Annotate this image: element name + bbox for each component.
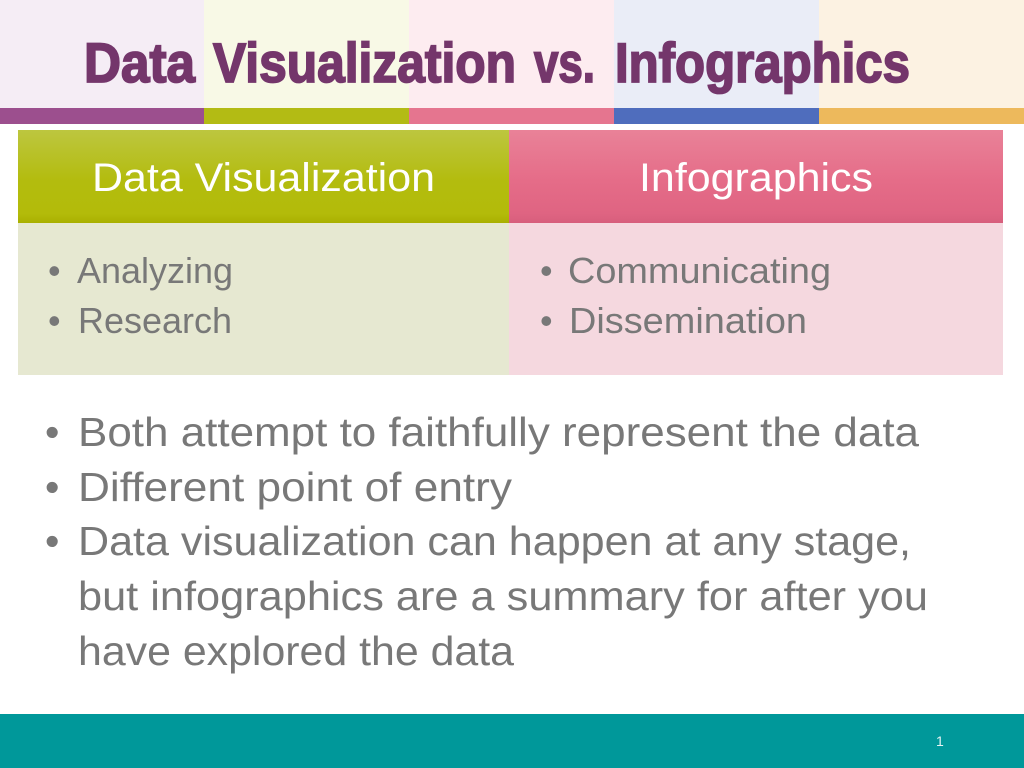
column header: data visualization (18, 130, 509, 223)
bullet list: Data visualization can happen at any stage, (78, 518, 911, 564)
panel: data visualization (18, 130, 509, 375)
column body: infographics: • (540, 300, 553, 341)
page number: 1 (936, 733, 944, 749)
header colour band (0, 0, 1024, 124)
column body: infographics: Dissemination (569, 300, 807, 341)
title: Infographics (615, 32, 910, 94)
bullet list (45, 409, 928, 674)
title: Data (84, 32, 196, 94)
column header: infographics: Infographics (639, 156, 873, 200)
title: vs. (534, 32, 595, 94)
column body: data visualization: • (48, 250, 61, 291)
bullet list: but infographics are a summary for after you (78, 573, 928, 619)
column header: infographics (509, 130, 1003, 223)
bullet list: • (45, 409, 59, 455)
column body: data visualization: • (48, 300, 61, 341)
title: Visualization (213, 32, 516, 94)
panel: infographics (509, 130, 1003, 375)
column body: infographics: Communicating (568, 250, 831, 291)
footer bar (0, 714, 1024, 768)
column body: data visualization (18, 223, 509, 375)
bullet list: • (45, 464, 59, 510)
bullet list: have explored the data (78, 628, 514, 674)
bullet list: Both attempt to faithfully represent the data (78, 409, 919, 455)
bullet list: Different point of entry (78, 464, 513, 510)
column body: data visualization: Analyzing (77, 250, 233, 291)
column body: data visualization: Research (78, 300, 232, 341)
column body: infographics (509, 223, 1003, 375)
column header: data visualization: Data Visualization (92, 156, 435, 200)
bullet list: • (45, 518, 59, 564)
column body: infographics: • (540, 250, 553, 291)
